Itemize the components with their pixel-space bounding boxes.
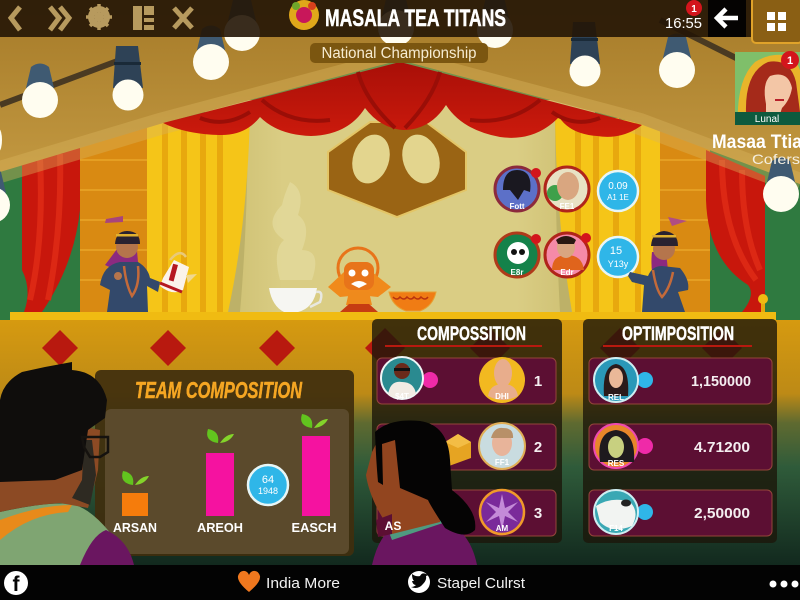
bar chart: EASCH (292, 520, 336, 535)
stage front diamonds (42, 328, 742, 368)
player card: 1 (787, 55, 793, 67)
title: MASALA TEA TITANS (325, 5, 506, 32)
left performer (100, 216, 160, 312)
avatar: masked man: Edr (560, 268, 574, 277)
stat badge bottom (598, 237, 638, 277)
link: india more: India More (266, 575, 340, 592)
bar chart: AREOH (197, 520, 243, 535)
icon: gear (86, 4, 112, 30)
hexagon emblem (328, 122, 466, 217)
stage back wall (80, 100, 710, 315)
panel: optimposition (583, 319, 777, 543)
bar chart: ARSAN (113, 520, 157, 535)
heading: COMPOSSITION (417, 324, 526, 345)
row 1: 1,150000 (691, 373, 751, 390)
row 2: 2 (534, 439, 542, 456)
stat badge top: A1 1E (607, 193, 629, 202)
row 1 (589, 358, 772, 404)
row 1: 1 (534, 373, 542, 390)
avatar: bald man: FE1 (560, 202, 575, 211)
player card: Lunal (755, 114, 779, 125)
icon: double chevron (50, 7, 69, 30)
icon: crossed tools (174, 8, 192, 28)
row 3: F14 (609, 524, 623, 533)
player card (735, 51, 800, 125)
stat badge (248, 465, 288, 505)
avatar: skull (495, 233, 541, 277)
foreground woman: AS (385, 519, 401, 533)
icon: owl mascot (328, 248, 391, 312)
ceiling (0, 0, 800, 184)
avatar: masked man (545, 233, 591, 277)
row 2: RES (608, 459, 625, 468)
steam (272, 182, 315, 280)
avatar: bald man (545, 167, 589, 211)
stat badge bottom: 15 (610, 245, 622, 257)
icon: tool bars (133, 6, 154, 30)
icon: facebook (4, 571, 28, 596)
row 2 (377, 423, 556, 470)
header bar (0, 0, 800, 43)
icon: facebook: f (12, 573, 20, 596)
stage rail (10, 294, 776, 320)
player name: Cofers (752, 151, 800, 167)
icon: more dots (770, 580, 798, 588)
grid button (752, 0, 800, 43)
bar chart (113, 414, 336, 535)
avatar: dark hair (495, 167, 541, 211)
heading: TEAM COMPOSITION (135, 377, 302, 403)
left red curtain (22, 148, 80, 312)
subtitle pill: National Championship (322, 45, 476, 62)
icon: gold crate (445, 434, 471, 466)
logo (289, 0, 319, 30)
stat badge: 64 (262, 474, 274, 486)
row 3 (377, 490, 556, 536)
stage lights (0, 0, 799, 223)
row 3 (589, 490, 772, 536)
link: stapel culrst: Stapel Culrst (437, 575, 526, 592)
right yellow curtain (555, 110, 660, 312)
stat badge: 1948 (258, 486, 278, 496)
red valance (163, 62, 642, 138)
clock: 16:55 (665, 15, 702, 32)
right performer (628, 217, 688, 312)
foreground woman (366, 420, 477, 565)
icon: bird (408, 571, 430, 593)
icon: back chevron (11, 7, 20, 30)
icon: tea cup (269, 288, 321, 312)
icon: orange bowl (389, 292, 436, 311)
avatar: skull: E8r (511, 268, 523, 277)
stat badge top: 0.09 (608, 181, 628, 192)
bottom bar (0, 565, 800, 600)
panel: composition (372, 319, 562, 543)
row 2: FF1 (495, 458, 510, 467)
icon: teapot (160, 253, 197, 292)
heading: OPTIMPOSITION (622, 324, 734, 345)
stat badge bottom: Y13y (608, 259, 629, 269)
notification badge (686, 0, 702, 16)
row 3: AM (496, 524, 509, 533)
stat badge top (598, 171, 638, 211)
row 1: DHI (495, 392, 509, 401)
row 1 (377, 357, 556, 404)
foreground man (0, 362, 134, 565)
notification badge: 1 (691, 4, 697, 15)
team avatars on stage (495, 167, 638, 277)
left yellow curtain (147, 110, 250, 312)
player name (712, 132, 800, 167)
row 3: 3 (534, 505, 542, 522)
row 1: $4T (395, 392, 409, 401)
avatar: dark hair: Fott (509, 202, 525, 211)
panel: team composition (95, 370, 354, 556)
row 2: 4.71200 (694, 439, 750, 456)
right red curtain (706, 150, 765, 312)
row 1: REL (608, 393, 624, 402)
icon: heart (238, 571, 260, 592)
back arrow button (708, 0, 746, 37)
row 3: 2,50000 (694, 505, 750, 522)
row 2 (589, 424, 772, 470)
